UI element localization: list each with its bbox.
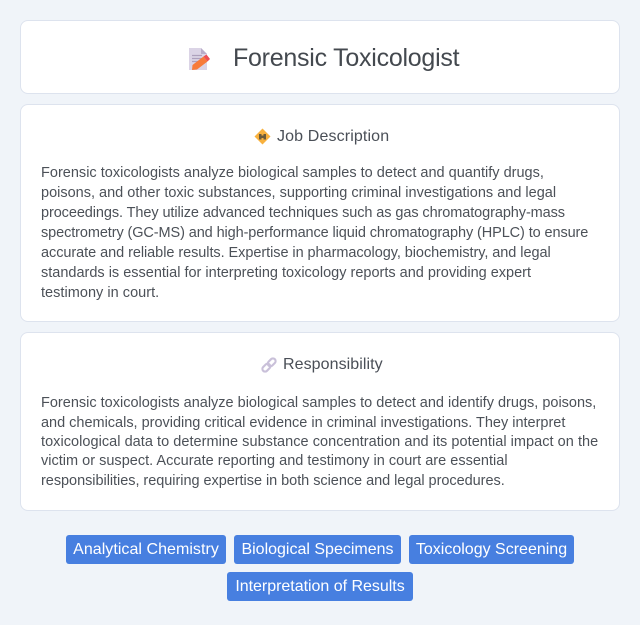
icon: document with pencil (189, 48, 210, 70)
text block: responsibility: toxicological data to determine substance concentration and its potential impact on the (41, 434, 598, 450)
panel: responsibility (20, 332, 620, 511)
text block: responsibility (41, 395, 598, 489)
icon: yellow diamond (254, 128, 270, 144)
text block: job description: Forensic toxicologists analyze biological samples to detect and quantify drugs, (41, 165, 544, 181)
tag: toxicology screening (409, 535, 574, 564)
text block: responsibility: and chemicals, providing critical evidence in criminal investigations. They interpret (41, 415, 565, 431)
text block: responsibility: victim or suspect. Accurate reporting and testimony in court are essential (41, 453, 508, 469)
heading: job description: Job Description (277, 128, 389, 145)
text block: responsibility: Forensic toxicologists analyze biological samples to detect and identify drugs, poisons, (41, 395, 596, 411)
text block: job description: poisons, and other toxic substances, supporting criminal investigations and legal (41, 185, 556, 201)
text block: job description: testimony in court. (41, 285, 159, 301)
title: Forensic Toxicologist (233, 44, 459, 72)
icon: chain link (261, 357, 277, 373)
tag: biological specimens: Biological Specimens (241, 541, 394, 558)
panel: title card (20, 20, 620, 94)
panel: job description (20, 104, 620, 322)
text block: job description: accurate and reliable results. Expertise in pharmacology, biochemistry, and legal (41, 245, 551, 261)
text block: responsibility: responsibilities, requiring expertise in both science and legal procedures. (41, 473, 505, 489)
text block: job description: standards is essential for interpreting toxicology reports and providing expert (41, 265, 531, 281)
text block: job description: proceedings. They utilize advanced techniques such as gas chromatography-mass (41, 205, 565, 221)
tag: interpretation of results: Interpretation of Results (235, 578, 405, 595)
tag: interpretation of results (227, 572, 413, 601)
tag: analytical chemistry (66, 535, 226, 564)
text block: job description: spectrometry (GC-MS) and high-performance liquid chromatography (HPLC) to ensure (41, 225, 588, 241)
heading: responsibility: Responsibility (283, 356, 383, 373)
tag: biological specimens (234, 535, 401, 564)
tag: analytical chemistry: Analytical Chemistry (73, 541, 219, 558)
text block: job description (41, 165, 588, 301)
tag: toxicology screening: Toxicology Screening (416, 541, 567, 558)
